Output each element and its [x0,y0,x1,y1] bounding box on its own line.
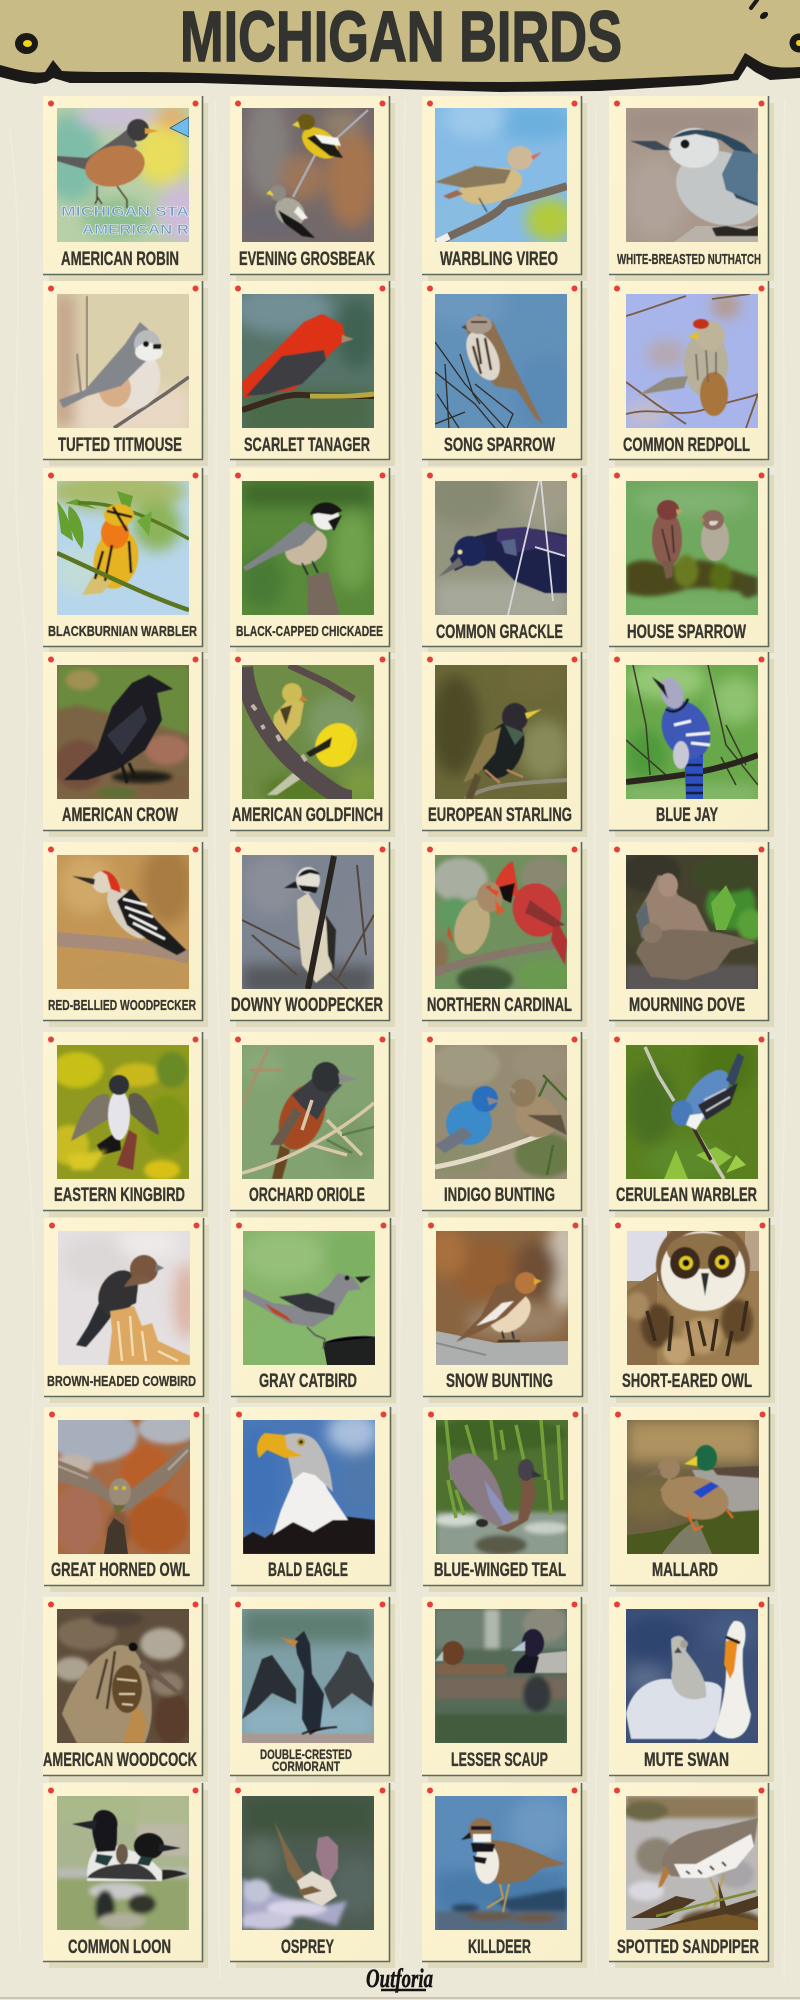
label: DOUBLE-CRESTED [260,1746,352,1762]
label: DOWNY WOODPECKER [231,994,383,1016]
card: Warbling Vireo [422,96,587,281]
label: EASTERN KINGBIRD [54,1184,185,1206]
photo: American Woodcock [54,1609,190,1745]
card: Bald Eagle [231,1407,396,1592]
label: WARBLING VIREO [440,248,558,270]
photo: Killdeer [435,1796,570,1933]
card: Lesser Scaup [422,1597,587,1782]
photo: Scarlet Tanager [242,294,374,428]
card: Scarlet Tanager [230,281,395,466]
photo: Great Horned Owl [48,1407,198,1554]
photo: American Robin: MICHIGAN STA [61,203,189,219]
photo: Common Redpoll [626,294,758,428]
label: MUTE SWAN [644,1749,729,1771]
card: White-breasted Nuthatch [609,96,777,281]
card: Mourning Dove [609,842,774,1027]
label: LESSER SCAUP [451,1749,548,1771]
label: GRAY CATBIRD [259,1370,357,1392]
card: American Goldfinch [230,652,395,837]
label: SNOW BUNTING [446,1370,553,1392]
card: American Robin [42,96,208,281]
card: American Crow [43,652,208,837]
photo: Cerulean Warbler [626,1035,758,1180]
photo: Northern Cardinal [432,855,573,994]
photo: American Robin: AMERICAN R [82,221,189,237]
photo: Evening Grosbeak [242,98,378,242]
label: CORMORANT [272,1758,340,1774]
title: MICHIGAN BIRDS [180,0,622,77]
photo: Tufted Titmouse [53,294,189,434]
card: Double-crested Cormorant [230,1597,395,1782]
card: Eastern Kingbird [43,1032,208,1217]
label: BROWN-HEADED COWBIRD [47,1373,196,1390]
card: American Woodcock [43,1597,208,1782]
photo: Orchard Oriole [240,1045,374,1179]
card: Song Sparrow [422,281,587,466]
card: Indigo Bunting [422,1032,587,1217]
header banner [0,0,800,92]
photo: Common Grackle [435,481,567,615]
card: Evening Grosbeak [230,96,395,281]
label: ORCHARD ORIOLE [249,1184,365,1206]
card: Northern Cardinal [422,842,587,1027]
label: BLACKBURNIAN WARBLER [48,623,197,640]
card: Black-capped Chickadee [230,468,395,653]
card: Downy Woodpecker [230,842,395,1027]
card: Cerulean Warbler [609,1032,774,1217]
icon: left eye [15,33,38,54]
card: Orchard Oriole [230,1032,395,1217]
label: MALLARD [652,1559,718,1581]
photo: Song Sparrow [435,294,567,428]
card: Common Grackle [422,466,587,653]
photo: European Starling [435,665,567,799]
card: House Sparrow [609,468,774,653]
label: COMMON GRACKLE [436,621,563,643]
photo: Downy Woodpecker [242,855,381,995]
card: Red-bellied Woodpecker [43,842,208,1027]
card: Tufted Titmouse [43,281,208,466]
card: Blue-winged Teal [423,1407,588,1592]
card: Killdeer [422,1783,587,1968]
label: MOURNING DOVE [629,994,745,1016]
label: BLUE-WINGED TEAL [434,1559,566,1581]
card: Mallard [610,1407,775,1592]
icon: right eye and marks [751,0,800,52]
card: European Starling [422,652,587,837]
label: BLACK-CAPPED CHICKADEE [236,623,383,640]
card: Great Horned Owl [44,1407,209,1592]
photo: Lesser Scaup [435,1606,567,1744]
label: AMERICAN ROBIN [61,248,179,270]
photo: American Robin [57,108,189,242]
label [260,1746,352,1774]
label: SONG SPARROW [444,434,555,456]
photo: White-breasted Nuthatch [626,108,758,242]
label: INDIGO BUNTING [444,1184,555,1206]
photo: Osprey [241,1796,383,1930]
photo: Snow Bunting [426,1211,580,1365]
card: Blackburnian Warbler [43,468,208,653]
card: Common Redpoll [609,281,774,466]
label: COMMON LOON [68,1936,171,1958]
photo: Warbling Vireo [435,108,567,242]
photo: Black-capped Chickadee [240,481,374,615]
photo: Mallard [622,1420,759,1554]
label: RED-BELLIED WOODPECKER [48,997,196,1014]
photo: Spotted Sandpiper [624,1796,761,1933]
label: EVENING GROSBEAK [239,248,375,270]
label: TUFTED TITMOUSE [58,434,182,456]
label: NORTHERN CARDINAL [427,994,572,1016]
card: Blue Jay [609,652,774,837]
photo: Blue Jay [626,660,760,805]
photo: Blue-winged Teal [426,1419,568,1557]
card: Osprey [230,1783,395,1968]
photo: Gray Catbird [243,1226,381,1365]
card: Spotted Sandpiper [609,1783,774,1968]
photo: Common Loon [57,1796,189,1933]
photo: Short-eared Owl [625,1220,759,1365]
card: Mute Swan [609,1597,774,1782]
photo: Eastern Kingbird [49,1045,189,1180]
photo: Blackburnian Warbler [57,481,189,615]
card: Common Loon [43,1783,208,1968]
card: Short-eared Owl [610,1218,775,1403]
label: HOUSE SPARROW [627,621,746,643]
card: Gray Catbird [231,1218,396,1403]
label: EUROPEAN STARLING [428,804,572,826]
label: SCARLET TANAGER [244,434,370,456]
photo: Red-bellied Woodpecker [57,855,189,989]
photo: Bald Eagle [234,1412,385,1554]
label: KILLDEER [468,1936,531,1958]
photo: House Sparrow [626,481,758,616]
photo: Brown-headed Cowbird [58,1229,198,1365]
card: Snow Bunting [423,1211,588,1403]
photo: American Goldfinch [242,665,374,799]
photo: Mute Swan [621,1609,766,1743]
label: AMERICAN WOODCOCK [43,1749,197,1771]
label: AMERICAN CROW [62,804,178,826]
logo: Outforia: Outforia [366,1964,433,1993]
photo: Mourning Dove [626,855,758,989]
label: BLUE JAY [656,804,718,826]
banner outline [0,53,800,92]
photo: American Crow [54,665,189,799]
label: BALD EAGLE [268,1559,348,1581]
photo: Double-crested Cormorant [242,1609,374,1744]
label: GREAT HORNED OWL [51,1559,190,1581]
label: OSPREY [281,1936,334,1958]
photo: Indigo Bunting [430,1043,575,1179]
card: Brown-headed Cowbird [44,1218,209,1403]
label: AMERICAN GOLDFINCH [232,804,383,826]
